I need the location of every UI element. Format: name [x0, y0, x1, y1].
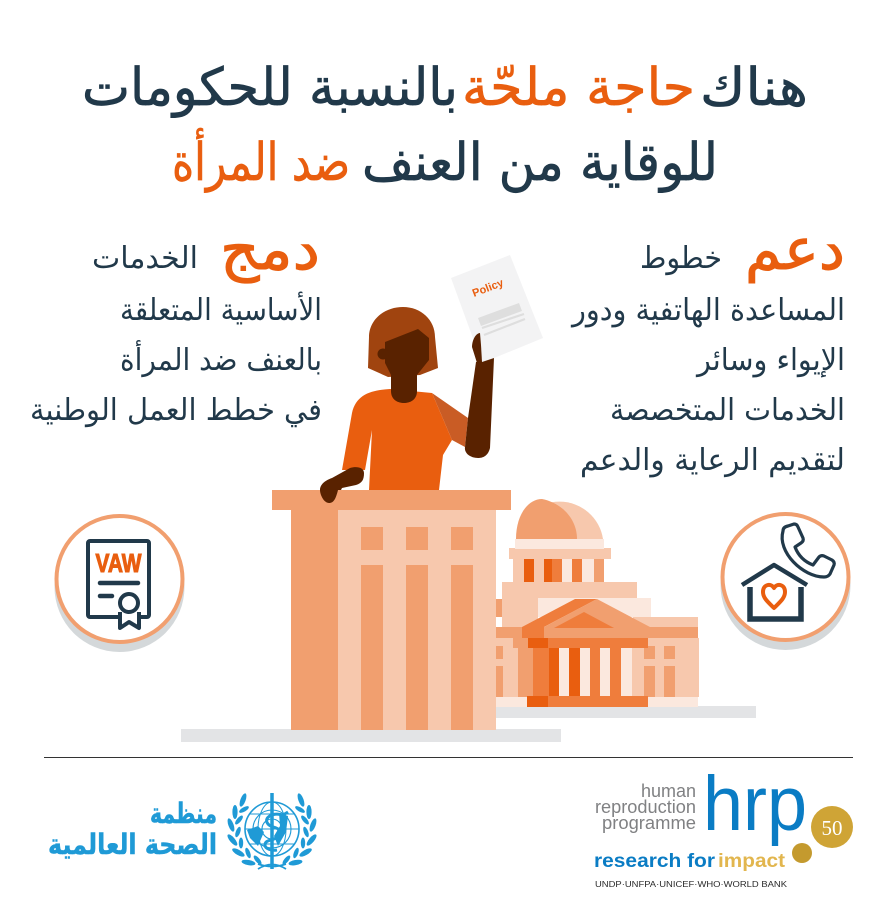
logo: HRP: programme — [602, 813, 696, 833]
logo: WHO wordmark — [48, 797, 217, 861]
text block: support: لتقديم الرعاية والدعم — [580, 443, 845, 478]
divider — [44, 756, 853, 758]
text block: support: خطوط — [640, 241, 722, 276]
text block: integrate: في خطط العمل الوطنية — [30, 393, 322, 428]
text block: support: المساعدة الهاتفية ودور — [570, 293, 845, 328]
title: للوقاية من العنف — [362, 133, 718, 193]
text block: integrate: دمج — [220, 215, 320, 283]
illustration: podium — [181, 490, 561, 742]
title: بالنسبة للحكومات — [82, 58, 458, 118]
text block: integrate: بالعنف ضد المرأة — [120, 339, 322, 378]
logo: WHO wordmark: منظمة — [150, 797, 217, 830]
text block: integrate: الأساسية المتعلقة — [120, 290, 322, 328]
illustration: woman with policy paper — [320, 255, 543, 503]
logo: HRP: UNDP·UNFPA·UNICEF·WHO·WORLD BANK — [595, 879, 787, 889]
text block: support: دعم — [745, 215, 845, 283]
logo: HRP: human — [641, 781, 696, 801]
title — [82, 58, 808, 193]
title: حاجة ملحّة — [462, 58, 695, 118]
logo: HRP: impact — [718, 851, 786, 872]
logo: HRP: 50 — [822, 816, 842, 840]
text block: support: الإيواء وسائر — [695, 343, 845, 378]
text block: support: الخدمات المتخصصة — [610, 393, 845, 428]
logo: HRP — [594, 761, 853, 889]
logo: HRP: research for — [594, 851, 716, 872]
icon: VAW certificate: VAW — [96, 548, 142, 578]
text block: integrate — [30, 215, 322, 428]
logo: WHO emblem — [226, 793, 318, 869]
icon: house and phone — [720, 514, 850, 650]
policy paper — [451, 255, 543, 363]
logo: HRP: hrp — [703, 761, 807, 847]
title: ضد المرأة — [172, 128, 350, 193]
title: هناك — [700, 58, 808, 118]
policy paper: Policy — [471, 277, 506, 300]
icon: VAW certificate — [54, 516, 184, 652]
logo: WHO wordmark: الصحة العالمية — [48, 828, 217, 861]
illustration: capitol building — [496, 499, 756, 718]
text block: support — [570, 215, 845, 478]
logo: HRP: reproduction — [595, 797, 696, 817]
text block: integrate: الخدمات — [92, 241, 198, 276]
